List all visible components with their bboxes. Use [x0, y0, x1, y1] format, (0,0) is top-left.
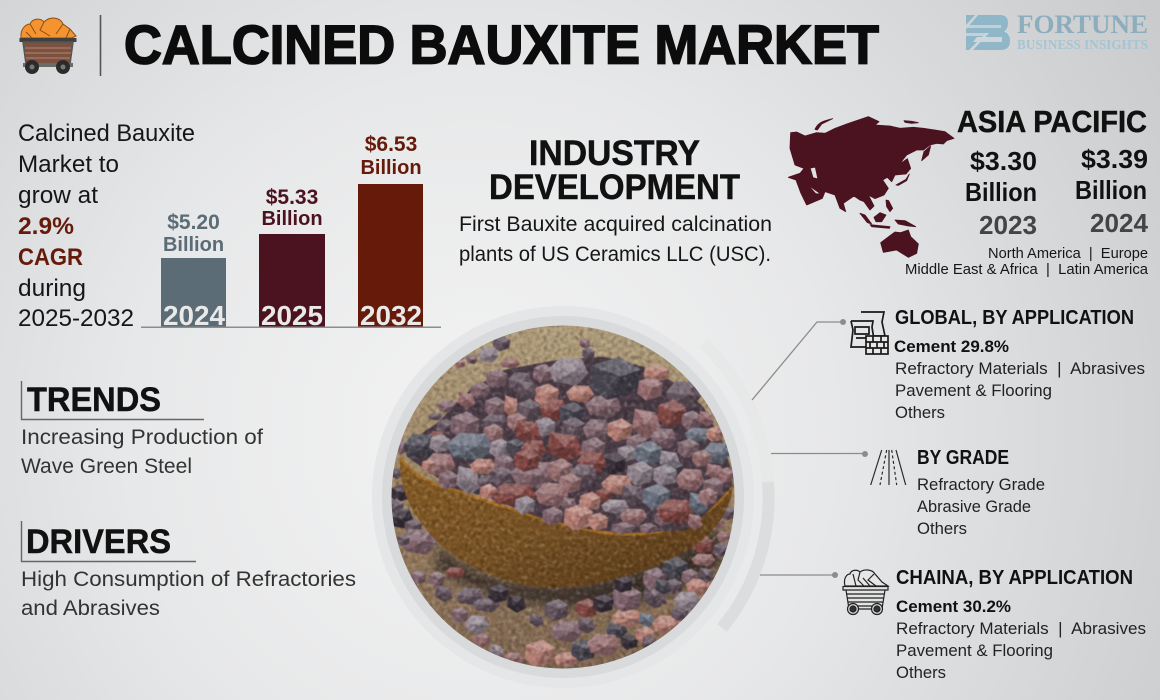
stat: Asia Pacific 2024: 2024 [1090, 208, 1149, 238]
photo: calcined bauxite in wooden bowl [372, 306, 754, 688]
loose rocks around bowl [386, 335, 736, 667]
industry development heading: DEVELOPMENT [489, 168, 740, 207]
section: China by application: Others [896, 663, 946, 682]
section: China by application: Cement 30.2% [896, 597, 1011, 616]
stat: Asia Pacific 2024: $3.39 [1081, 144, 1148, 174]
text: other regions: Middle East & Africa | Latin America [905, 261, 1149, 278]
text: CAGR statement: 2025-2032 [18, 305, 134, 332]
bar: 2024: Billion [163, 234, 224, 256]
wooden bowl [400, 457, 733, 587]
icon: FB mark [966, 14, 1010, 50]
section: drivers: DRIVERS [26, 523, 171, 561]
section: global by application: Others [895, 403, 945, 422]
connector: China by application [760, 572, 838, 578]
logo: Fortune Business Insights: BUSINESS INSIGHTS [1017, 37, 1148, 52]
bar chart: market size [141, 133, 441, 331]
stat: Asia Pacific 2023 [965, 146, 1037, 240]
text: CAGR statement: during [18, 275, 86, 302]
bar: 2024 [161, 211, 226, 331]
bar: 2025: Billion [261, 208, 323, 230]
text: industry development detail [459, 213, 772, 266]
industry development heading [489, 134, 740, 207]
text: CAGR statement: CAGR [18, 244, 83, 271]
logo: Fortune Business Insights: FORTUNE [1017, 10, 1148, 39]
icon: cement bags and bricks [851, 312, 888, 354]
section: trends: Increasing Production of [21, 426, 263, 449]
bar: 2025: 2025 [261, 300, 323, 331]
text: other regions: North America | Europe [988, 245, 1148, 262]
section: global by application: GLOBAL, BY APPLICATION [895, 307, 1134, 329]
text: CAGR statement [18, 120, 195, 332]
bar: 2032: 2032 [360, 300, 422, 331]
stat: Asia Pacific 2023: $3.30 [970, 146, 1037, 176]
section: by grade: Others [917, 519, 967, 538]
section: China by application: Pavement & Flooring [896, 641, 1053, 660]
rock pile [407, 357, 733, 533]
text: CAGR statement: grow at [18, 182, 98, 209]
icon: road [871, 450, 906, 485]
connector: by grade [771, 451, 868, 457]
section: drivers: High Consumption of Refractories [21, 568, 356, 591]
section: trends: TRENDS [27, 381, 161, 419]
text: CAGR statement: Market to [18, 151, 119, 178]
bar: 2025: $5.33 [266, 186, 318, 209]
title: CALCINED BAUXITE MARKET [124, 14, 879, 76]
section: China by application [896, 567, 1146, 682]
bar: 2024: $5.20 [167, 211, 220, 234]
stat: Asia Pacific 2023: Billion [965, 177, 1037, 207]
icon: ore mine cart [20, 18, 76, 74]
section: global by application: Refractory Materials | Abrasives [895, 359, 1145, 378]
section: by grade: BY GRADE [917, 447, 1009, 469]
logo: Fortune Business Insights [966, 10, 1148, 52]
connector: global by application [752, 319, 846, 400]
section: trends [21, 381, 263, 478]
bar: 2032: $6.53 [365, 133, 417, 156]
icon: outline mine cart [843, 570, 888, 614]
stat: Asia Pacific 2024 [1075, 144, 1149, 238]
section: drivers [21, 521, 356, 620]
text: industry development detail: First Bauxite acquired calcination [459, 213, 772, 236]
section: global by application: Pavement & Flooring [895, 381, 1052, 400]
section: by grade: Refractory Grade [917, 475, 1045, 494]
bar: 2024: 2024 [163, 300, 225, 331]
text: CAGR statement: Calcined Bauxite [18, 120, 195, 147]
bar: 2032 [358, 133, 423, 331]
stat: Asia Pacific 2023: 2023 [979, 210, 1037, 240]
heading: Asia Pacific: ASIA PACIFIC [957, 104, 1147, 139]
section: by grade: Abrasive Grade [917, 497, 1031, 516]
section: global by application [894, 307, 1145, 422]
section: trends: Wave Green Steel [21, 455, 192, 478]
bar: 2032: Billion [360, 157, 422, 179]
decorative arc [703, 343, 769, 628]
section: China by application: CHAINA, BY APPLICATION [896, 567, 1133, 589]
map: Asia Pacific [788, 117, 954, 257]
section: by grade [917, 447, 1045, 538]
industry development heading: INDUSTRY [529, 134, 700, 173]
text: other regions [905, 245, 1149, 278]
shadow under bowl [437, 523, 723, 607]
bar: 2025 [259, 186, 325, 331]
section: drivers: and Abrasives [21, 597, 160, 620]
section: China by application: Refractory Materials | Abrasives [896, 619, 1146, 638]
section: global by application: Cement 29.8% [894, 337, 1009, 356]
stat: Asia Pacific 2024: Billion [1075, 175, 1147, 205]
text: CAGR statement: 2.9% [18, 213, 74, 240]
text: industry development detail: plants of US Ceramics LLC (USC). [459, 243, 771, 266]
